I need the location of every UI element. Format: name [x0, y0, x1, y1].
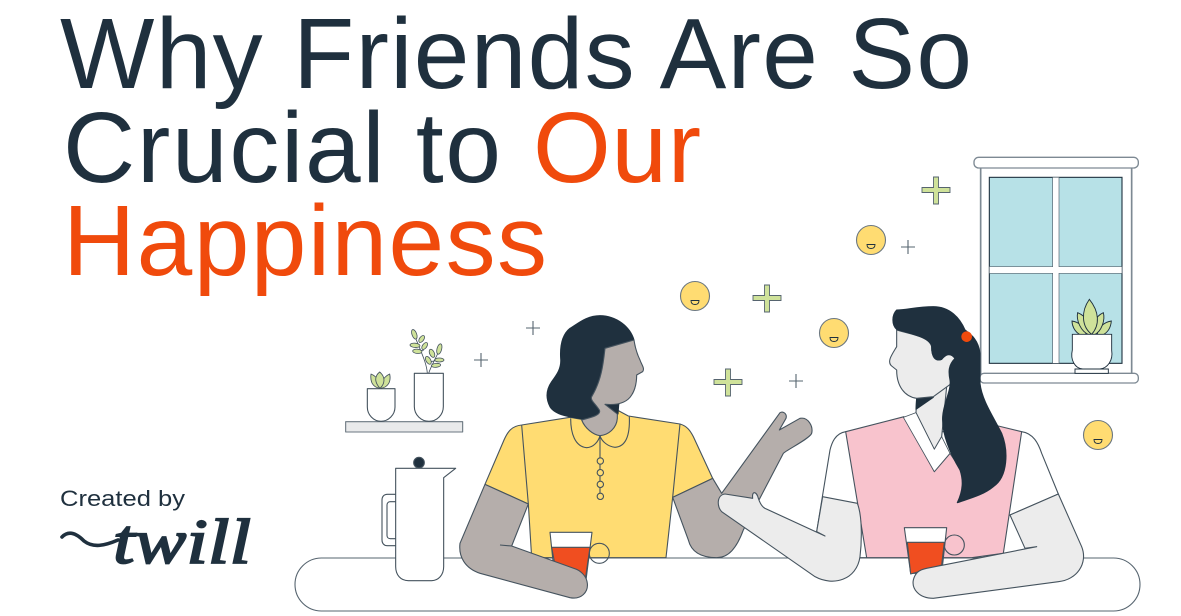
smiley 3	[856, 226, 886, 254]
window with plant	[974, 157, 1138, 383]
title: Happiness	[63, 185, 547, 297]
created by credit: Created by	[60, 486, 186, 511]
raised arm	[673, 412, 812, 558]
smiley 4	[1084, 420, 1112, 450]
mug	[904, 528, 964, 574]
created by credit	[60, 486, 251, 577]
smiley 2	[820, 318, 848, 348]
forearm right	[913, 494, 1084, 598]
left woman	[460, 316, 713, 598]
mug	[550, 532, 609, 580]
hair	[547, 316, 634, 419]
neck	[916, 387, 947, 449]
white shirt	[817, 432, 1058, 558]
title: Why Friends Are So	[60, 0, 972, 110]
title	[60, 0, 972, 297]
thin plus signs	[474, 240, 915, 388]
neck and face	[582, 340, 643, 436]
tall pot plant	[410, 329, 444, 421]
table	[295, 558, 1140, 611]
right woman and left woman's raised arm	[673, 307, 1084, 598]
dark neck shadow	[916, 397, 933, 409]
left woman and shelf scene	[346, 316, 713, 598]
smiley 1	[680, 282, 710, 310]
created by credit: twill	[113, 506, 251, 577]
green plus signs	[714, 177, 950, 396]
collar and placket	[522, 417, 680, 504]
left arm	[460, 484, 587, 598]
shelf	[346, 422, 463, 432]
title: Crucial to	[63, 92, 501, 204]
vest	[846, 417, 1022, 558]
coffee pitcher	[382, 457, 456, 581]
face	[890, 330, 955, 398]
forearm left	[718, 493, 861, 581]
title: Our	[533, 92, 701, 204]
right woman	[718, 307, 1084, 598]
sparkles and smileys	[474, 177, 1112, 450]
shirt	[485, 411, 713, 558]
hair tie	[961, 331, 972, 342]
shirt collar	[903, 413, 950, 472]
ponytail hair	[893, 307, 1006, 503]
small pot plant	[367, 372, 395, 421]
window plant	[1072, 299, 1112, 373]
